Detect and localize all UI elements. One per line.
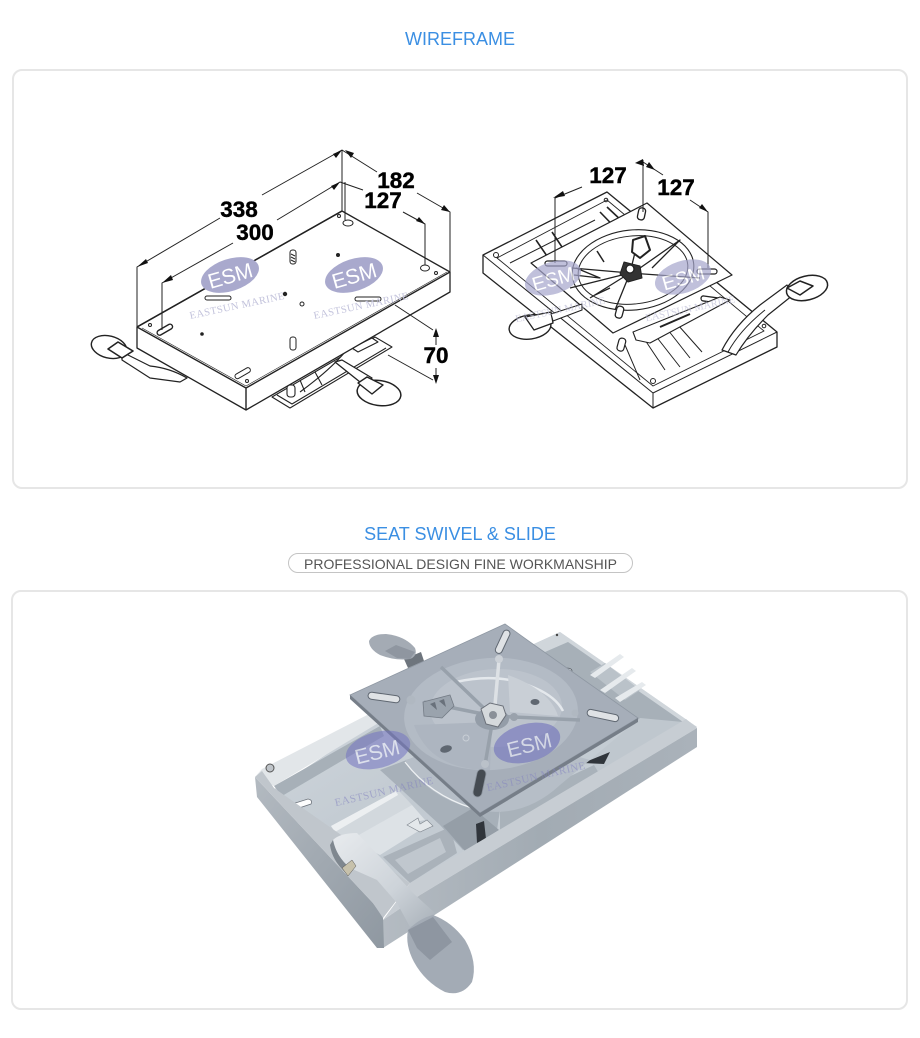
spokes — [424, 667, 580, 765]
watermarks: left drawing: ESM — [205, 259, 255, 294]
centre hub — [475, 708, 509, 730]
dimension labels: left drawing: 182 — [377, 168, 415, 193]
photo watermarks — [334, 716, 587, 809]
fork bracket — [423, 695, 454, 718]
ring recess — [400, 652, 582, 776]
swivel plate — [531, 203, 732, 333]
dimension labels: left drawing — [220, 168, 449, 368]
dimension labels: left drawing: 338 — [220, 197, 258, 222]
watermarks: right drawing: EASTSUN MARINE — [645, 295, 736, 324]
watermarks: right drawing — [515, 253, 736, 325]
heading: seat swivel and slide: SEAT SWIVEL & SLIDE — [364, 524, 556, 544]
mounting slots — [368, 692, 400, 703]
right lever — [335, 360, 403, 408]
left lever — [89, 332, 187, 382]
subtitle pill: PROFESSIONAL DESIGN FINE WORKMANSHIP — [304, 556, 617, 572]
watermarks: left drawing — [189, 251, 410, 322]
dimension labels: left drawing: 300 — [236, 220, 274, 245]
panel: wireframe — [13, 70, 907, 488]
right lever — [722, 285, 793, 355]
slide frame — [483, 192, 777, 408]
bearing underside — [405, 735, 590, 812]
heading: wireframe: WIREFRAME — [405, 29, 515, 49]
bearing ring — [568, 224, 698, 316]
photo watermarks: ESM — [353, 736, 402, 769]
photo watermarks: EASTSUN MARINE — [334, 775, 435, 809]
photo watermarks: ESM — [505, 729, 554, 762]
watermarks: left drawing: ESM — [329, 259, 379, 294]
track and fork — [331, 790, 457, 883]
photo watermarks: EASTSUN MARINE — [486, 760, 587, 794]
dimension labels: right drawing: 127 — [657, 175, 695, 200]
dimension labels: left drawing: 70 — [423, 343, 449, 368]
near left rail — [255, 712, 384, 810]
front wall — [255, 771, 410, 948]
dimension labels: right drawing: 127 — [589, 163, 627, 188]
swivel plate — [350, 624, 638, 817]
panel: product photo — [12, 591, 907, 1009]
frame floor — [273, 632, 697, 893]
long side wall — [383, 719, 697, 948]
wireframe drawing: underside view with dimensions — [483, 159, 830, 408]
sliding carriage — [380, 752, 610, 851]
lower swivel plate — [272, 337, 392, 408]
watermarks: left drawing: EASTSUN MARINE — [189, 291, 286, 322]
product: swivel and slide assembly — [255, 624, 697, 993]
top plate — [137, 211, 450, 410]
dimension lines — [137, 150, 450, 382]
left lever — [508, 312, 552, 342]
floor right of plate — [590, 718, 683, 775]
far frame end — [533, 632, 697, 738]
far lever paddle — [369, 634, 424, 668]
near lever — [330, 833, 474, 993]
wireframe drawing: top view with dimensions — [89, 150, 450, 410]
watermarks: right drawing: ESM — [660, 262, 707, 295]
watermarks: left drawing: EASTSUN MARINE — [313, 291, 410, 322]
slots and holes — [148, 214, 438, 382]
slide bar — [633, 297, 730, 343]
ring hub and spokes — [570, 207, 700, 319]
watermarks: right drawing: EASTSUN MARINE — [515, 296, 606, 325]
dimension labels: right drawing — [589, 163, 695, 200]
dimension labels: left drawing: 127 — [364, 188, 402, 213]
plate slots — [545, 261, 567, 266]
dimension lines — [555, 160, 708, 268]
watermarks: right drawing: ESM — [530, 263, 577, 296]
